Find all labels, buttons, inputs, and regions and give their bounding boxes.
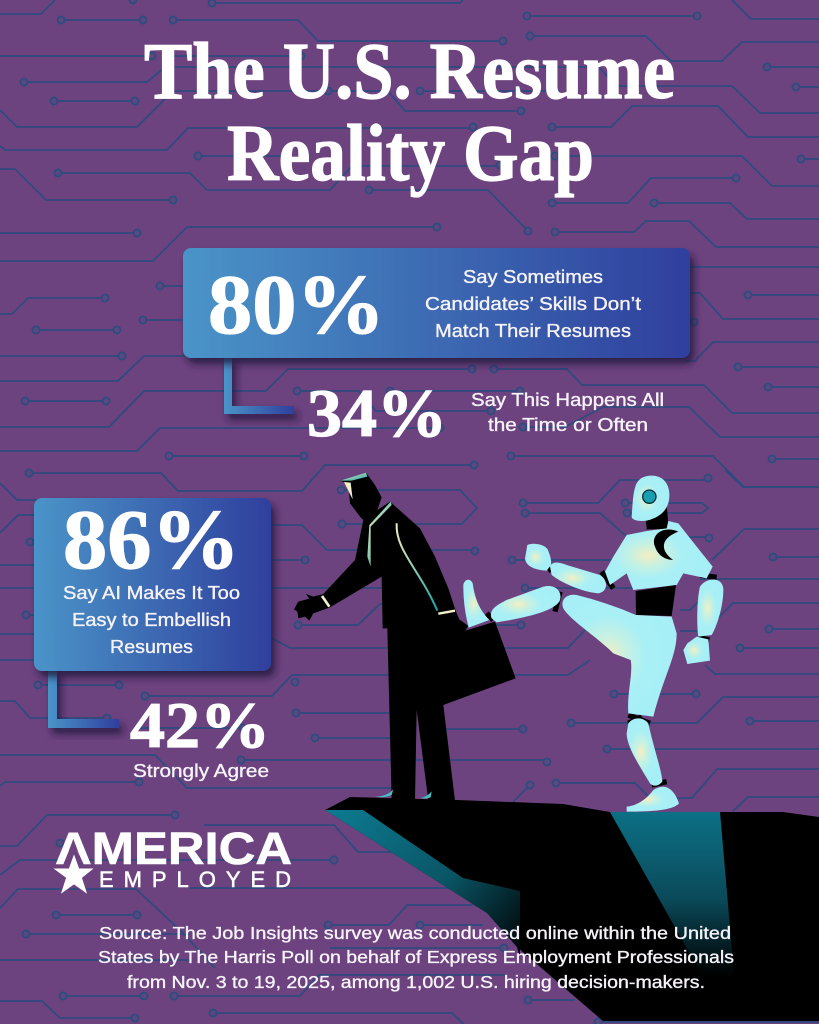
panel: 80 percent callout: Say Sometimes — [463, 267, 603, 287]
panel: 86 percent callout — [34, 493, 271, 671]
stat: 34 percent: 34% — [307, 375, 447, 451]
logo: America Employed: AMERICA — [55, 823, 292, 874]
title: Reality Gap — [227, 110, 594, 198]
panel: 86 percent callout: Easy to Embellish — [72, 610, 231, 630]
title — [144, 28, 675, 198]
stat: 34 percent: Say This Happens All — [471, 390, 664, 410]
source note: States by The Harris Poll on behalf of Express Employment Professionals — [98, 947, 734, 967]
source note: Source: The Job Insights survey was conducted online within the United — [99, 923, 731, 943]
panel: 80 percent callout — [183, 248, 690, 358]
logo: America Employed: EMPLOYED — [99, 867, 291, 892]
connector: 80% to 34% — [224, 355, 294, 414]
panel: 86 percent callout: Say AI Makes It Too — [63, 583, 240, 603]
stat: 34 percent — [307, 375, 664, 451]
panel: 80 percent callout: 80% — [208, 258, 385, 352]
panel: 80 percent callout: Match Their Resumes — [435, 321, 631, 341]
stat: 42 percent: Strongly Agree — [133, 761, 269, 781]
source note — [98, 923, 734, 992]
illustration: cliff — [325, 797, 819, 1021]
connector: 86% to 42% — [48, 668, 119, 728]
logo: America Employed — [52, 823, 292, 895]
source note: from Nov. 3 to 19, 2025, among 1,002 U.S. hiring decision-makers. — [127, 972, 705, 992]
stat: 42 percent: 42% — [130, 690, 270, 762]
title: The U.S. Resume — [144, 28, 675, 116]
panel: 80 percent callout: Candidates’ Skills Don’t — [425, 294, 641, 314]
panel: 86 percent callout: Resumes — [110, 637, 193, 657]
panel: 86 percent callout: 86% — [63, 493, 240, 587]
illustration: robot kicking — [463, 476, 723, 812]
illustration: businessman with briefcase — [294, 473, 516, 801]
stat: 34 percent: the Time or Often — [488, 415, 648, 435]
